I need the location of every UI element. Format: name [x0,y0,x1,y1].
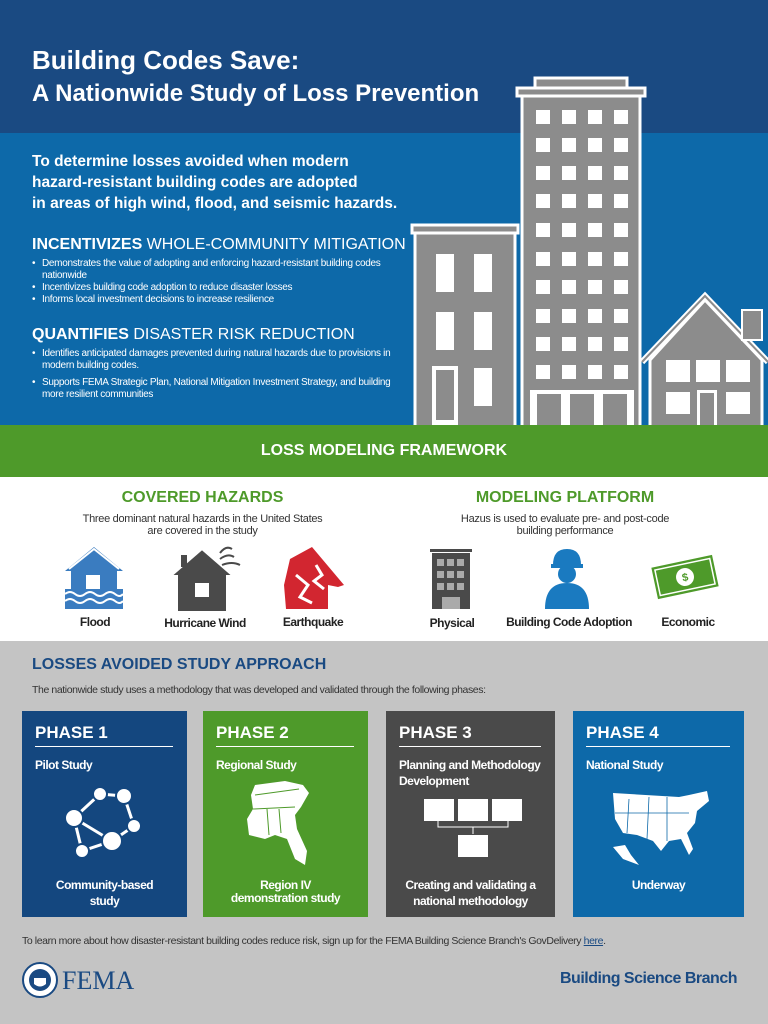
covered hazards heading: are covered in the study [147,525,258,537]
phase 2: demonstration study [231,891,340,905]
intro text [32,153,397,212]
intro band [0,133,768,425]
modeling platform heading: Hazus is used to evaluate pre- and post-code [461,513,669,525]
approach intro: The nationwide study uses a methodology that was developed and validated through the following phases: [32,684,486,696]
phase 1: Pilot Study [35,758,92,772]
green band heading [0,425,768,477]
icon: hurricane wind [174,546,240,611]
intro text: To determine losses avoided when modern [32,153,349,170]
footer note: To learn more about how disaster-resistant building codes reduce risk, sign up for the FEMA Building Science Branch's GovDelivery here. [22,935,606,947]
phase 3: Creating and validating a [405,878,536,892]
modeling platform heading [461,489,669,537]
section: incentivizes: Informs local investment decisions to increase resilience [42,294,274,305]
phase 4 [573,711,744,917]
phase 2: PHASE 2 [216,723,289,742]
green band heading: LOSS MODELING FRAMEWORK [261,442,507,459]
section: incentivizes: INCENTIVIZES WHOLE-COMMUNITY MITIGATION [32,236,406,253]
phase 4: Underway [632,878,685,892]
icon: money: $ [681,571,689,584]
title: Building Codes Save: [32,45,299,75]
intro text: in areas of high wind, flood, and seismic hazards. [32,195,397,212]
phase 1: PHASE 1 [35,723,108,742]
building science branch: Building Science Branch [560,970,737,987]
white framework panel: Hurricane Wind [164,616,246,630]
header band [0,0,768,133]
white framework panel: Economic [661,615,715,629]
section: quantifies: QUANTIFIES DISASTER RISK REDUCTION [32,326,355,343]
illustration: buildings [410,76,768,425]
FEMA logo: FEMA [62,966,134,995]
section: quantifies: Supports FEMA Strategic Plan, National Mitigation Investment Strategy, and building more resilient communities [42,377,390,400]
icon: US map [613,791,709,865]
phase 2: Regional Study [216,758,296,772]
phase 3 [386,711,555,917]
phase 2: Region IV [260,878,311,892]
covered hazards heading: COVERED HAZARDS [122,489,283,506]
phase 4: National Study [586,758,663,772]
white framework panel: Building Code Adoption [506,615,632,629]
icon: earthquake [284,547,344,609]
phase 1: study [90,894,119,908]
FEMA logo [22,962,134,998]
phase 1: Community-based [56,878,153,892]
white framework panel [0,477,768,641]
approach heading: LOSSES AVOIDED STUDY APPROACH [32,656,326,673]
icon: flood [65,547,123,609]
covered hazards heading [82,489,322,537]
icon: money [651,554,719,600]
phase 3: PHASE 3 [399,723,472,742]
section: incentivizes [32,236,406,305]
white framework panel: Earthquake [283,615,343,629]
icon: physical building [430,549,472,609]
covered hazards heading: Three dominant natural hazards in the United States [83,513,322,525]
white framework panel: Physical [430,616,474,630]
icon: network [66,788,140,857]
section: incentivizes: Incentivizes building code adoption to reduce disaster losses [42,282,292,293]
modeling platform heading: MODELING PLATFORM [476,489,654,506]
phase 3: Planning and Methodology [399,758,540,772]
icon: worker [545,549,589,609]
phase 2 [203,711,368,917]
title: A Nationwide Study of Loss Prevention [32,80,479,107]
phase 1 [22,711,187,917]
icon: flowchart [424,799,522,857]
labels: Flood [80,615,110,629]
phase 3: Development [399,774,469,788]
section: incentivizes: Demonstrates the value of adopting and enforcing hazard-resistant building codes nationwide [42,258,380,281]
section: quantifies: Identifies anticipated damages prevented during natural hazards due to provisions in modern building codes. [42,348,390,371]
phase 3: national methodology [413,894,528,908]
intro text: hazard-resistant building codes are adopted [32,174,358,191]
section: quantifies [32,326,390,400]
title [32,45,479,107]
modeling platform heading: building performance [517,525,613,537]
phase 4: PHASE 4 [586,723,659,742]
icon: southeast map [247,781,309,865]
